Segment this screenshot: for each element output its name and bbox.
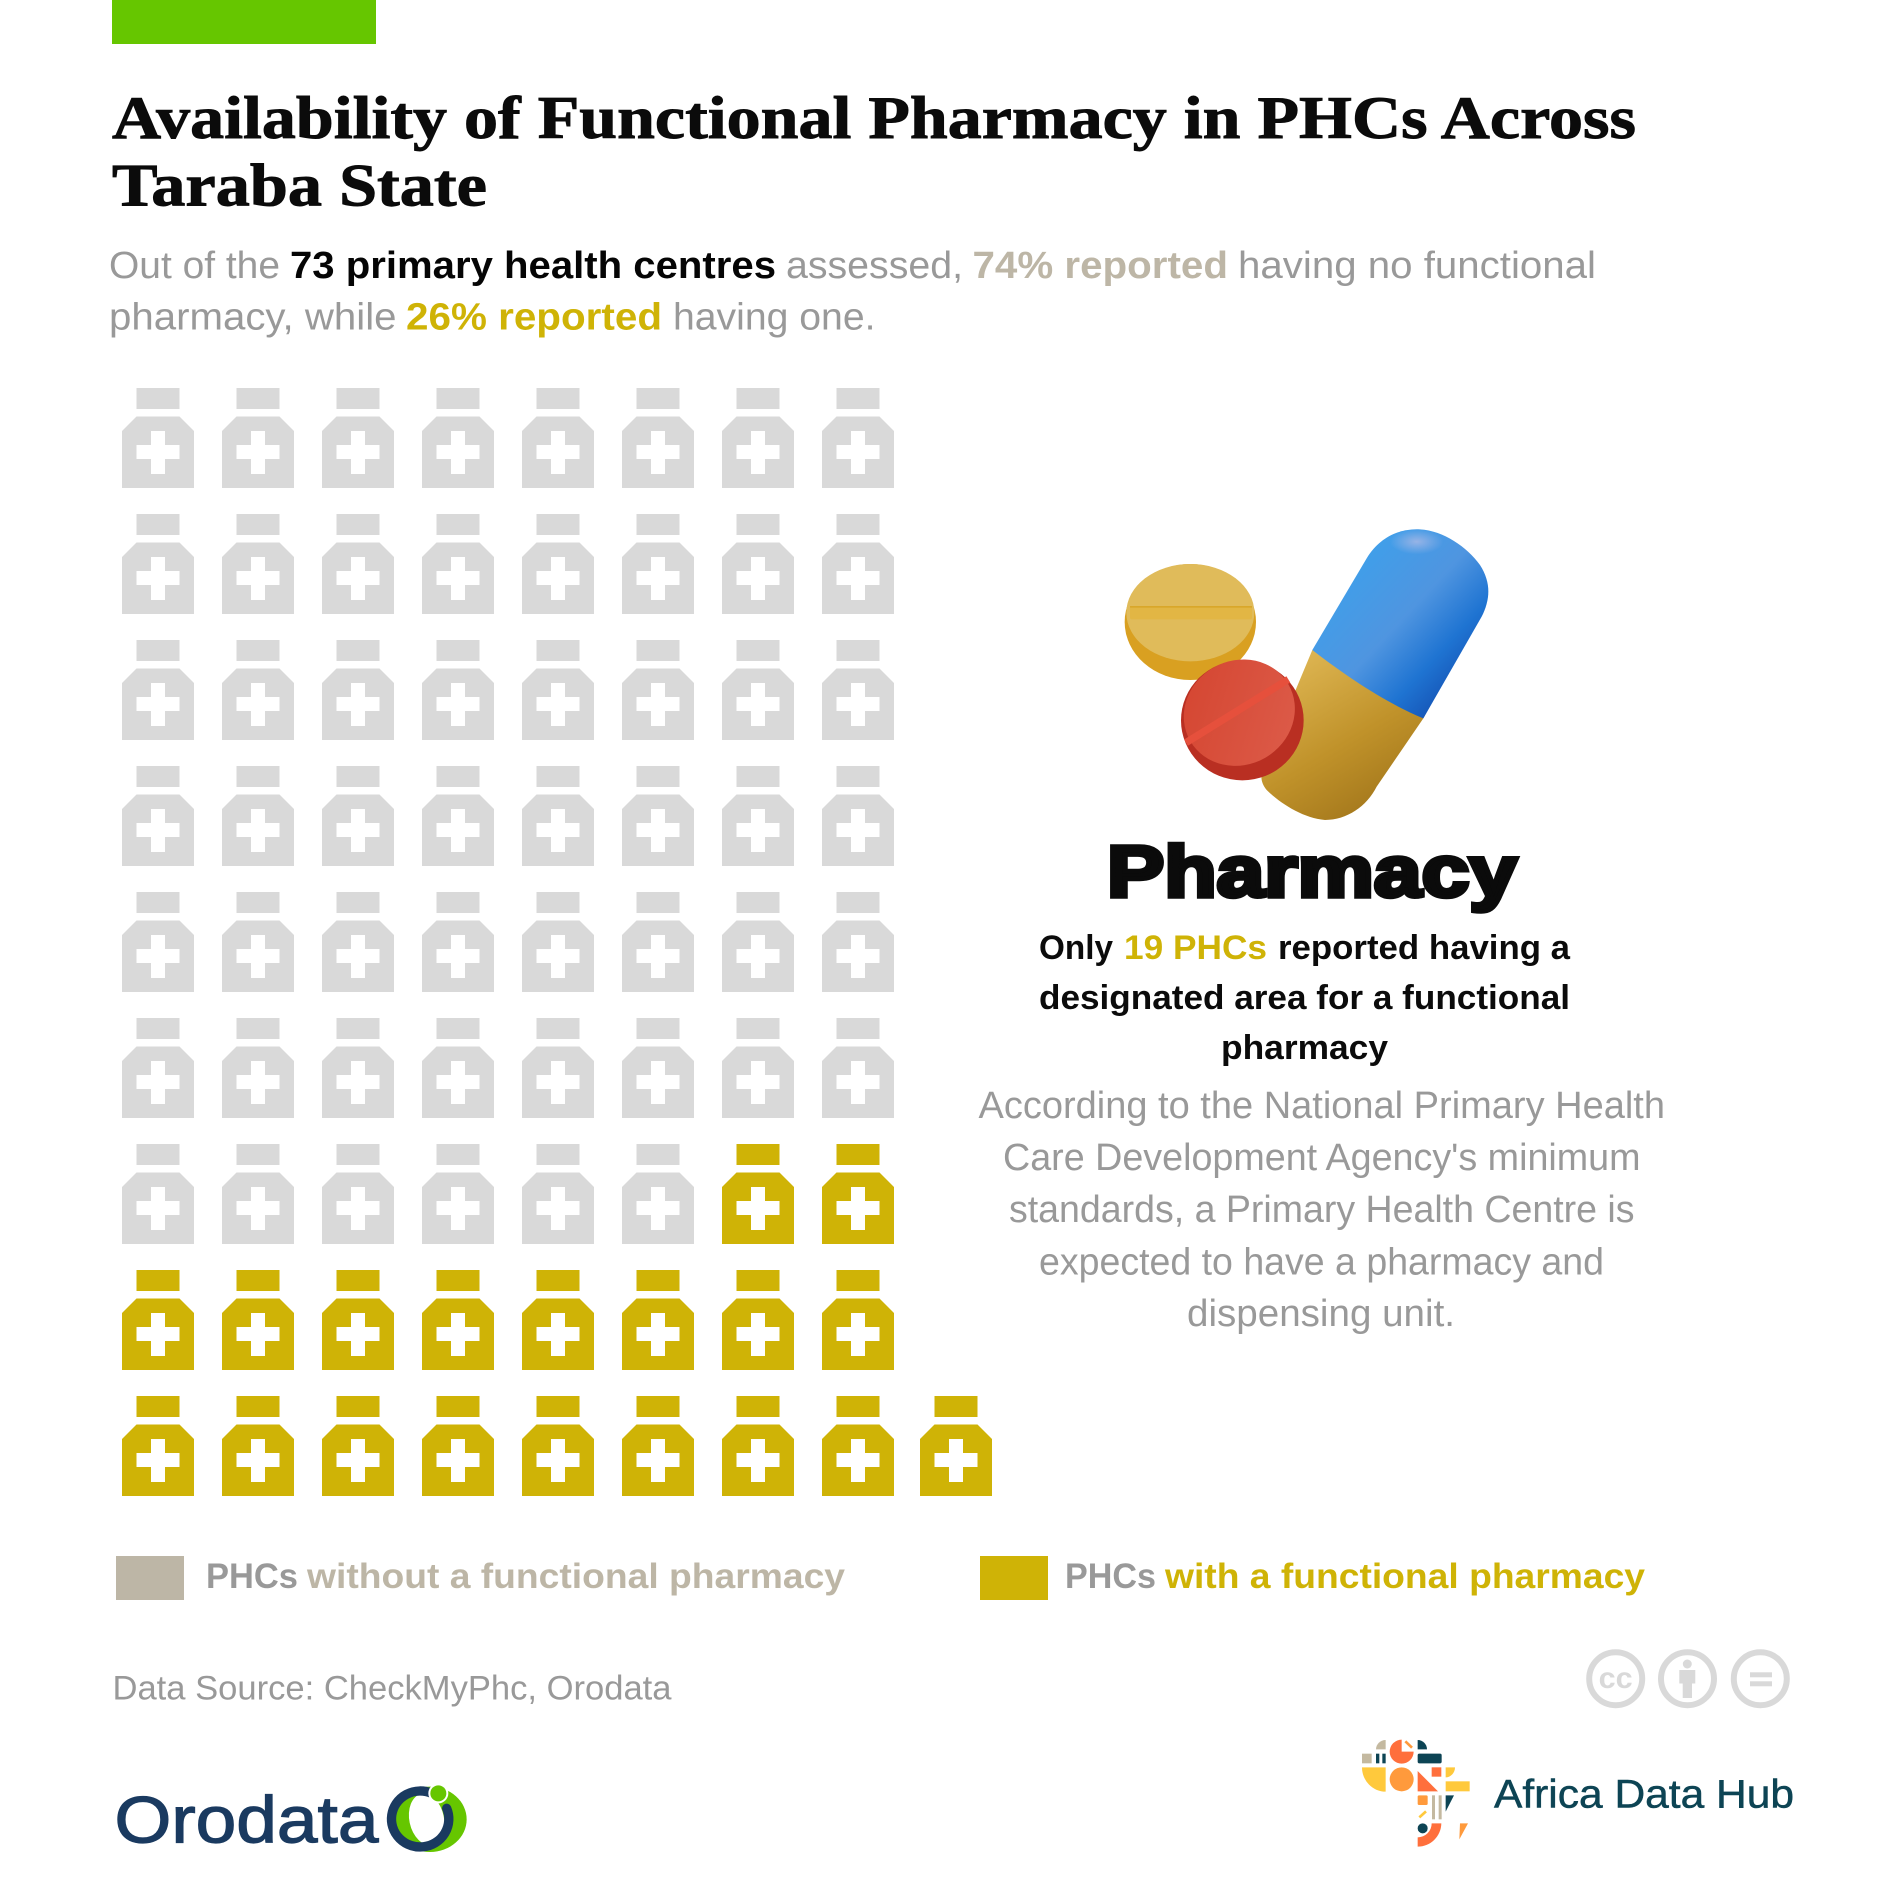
row 2 [122,514,894,614]
text block: minimum standards: expected to have a pharmacy and [1039,1242,1604,1284]
row 5 [122,892,894,992]
green accent bar [112,0,376,44]
callout: 19 PHCs: Only [1039,929,1113,967]
gold tablet [1125,564,1256,680]
row 9 [122,1396,992,1496]
icon: creative commons licence [1589,1652,1787,1705]
callout: 19 PHCs [1039,929,1571,1067]
callout: 19 PHCs: 19 PHCs [1124,929,1267,967]
text block: minimum standards: standards, a Primary Health Centre is [1009,1189,1634,1231]
text block: minimum standards: dispensing unit. [1187,1293,1455,1335]
subtitle: pharmacy, while [109,296,396,338]
icon: cc: cc [1599,1662,1633,1695]
legend: with pharmacy: with a functional pharmacy [1164,1557,1646,1596]
wordmark: Orodata [114,1782,379,1856]
subtitle: Out of the [109,245,280,287]
text block: minimum standards: Care Development Agency's minimum [1003,1137,1640,1179]
icon: pills and capsule [1125,529,1488,820]
subtitle: 74% reported [972,245,1228,287]
logo: Africa Data Hub [1362,1740,1794,1847]
legend: without pharmacy [116,1556,846,1600]
icon: attribution [1661,1652,1714,1705]
row 6 [122,1018,894,1118]
row 4 [122,766,894,866]
legend: without pharmacy: without a functional pharmacy [306,1557,846,1596]
legend: without pharmacy: PHCs [206,1557,298,1596]
subtitle: having one. [673,296,876,338]
Africa mosaic mark [1362,1740,1470,1847]
title: Availability of Functional Pharmacy in PHCs Across [112,85,1636,151]
title: Taraba State [112,152,487,218]
data source: Data Source: CheckMyPhc, Orodata [112,1670,672,1708]
title [112,85,1636,218]
logo: Orodata [114,1782,467,1856]
subtitle: having no functional [1238,245,1596,287]
legend: with pharmacy: PHCs [1065,1557,1156,1596]
subtitle [109,245,1596,338]
row 3 [122,640,894,740]
pictogram: bottles for PHCs without a functional pharmacy [122,388,894,1244]
callout: 19 PHCs: reported having a [1278,929,1571,967]
row 1 [122,388,894,488]
subtitle: assessed, [786,245,963,287]
red tablet [1164,639,1314,786]
subtitle: 73 primary health centres [290,245,776,287]
row 7 yellow part [722,1144,894,1244]
icon: no derivatives [1734,1652,1787,1705]
wordmark: Africa Data Hub [1494,1773,1794,1817]
legend: with pharmacy [980,1556,1646,1600]
capsule gold half [1261,633,1433,820]
capsule blue half [1312,529,1488,718]
icon: cc [1589,1652,1642,1705]
callout: 19 PHCs: designated area for a functional [1039,979,1570,1017]
row 7 grey part [122,1144,694,1244]
pictogram: bottles for PHCs with a functional pharmacy [122,1144,992,1496]
ring mark [391,1783,467,1852]
row 8 [122,1270,894,1370]
heading: Pharmacy: Pharmacy [1107,832,1517,912]
text block: minimum standards [978,1085,1665,1335]
subtitle: 26% reported [406,296,662,338]
text block: minimum standards: According to the National Primary Health [978,1085,1665,1127]
callout: 19 PHCs: pharmacy [1221,1029,1388,1067]
